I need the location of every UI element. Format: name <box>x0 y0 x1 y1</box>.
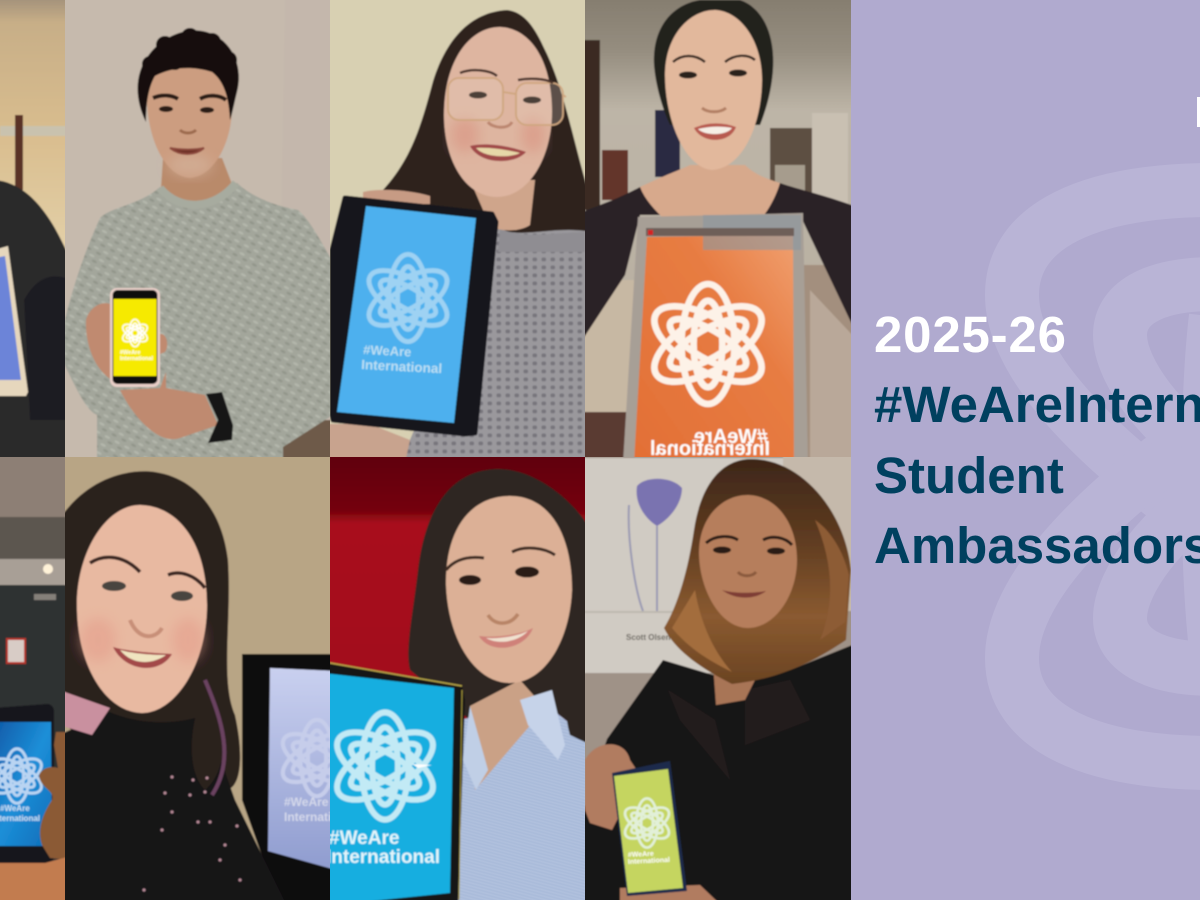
photo 3: woman with glasses and blue tablet: International <box>361 357 443 376</box>
face <box>446 496 572 683</box>
watch <box>206 392 233 443</box>
hair <box>654 0 773 125</box>
photo 8: woman in black coat with lime phone: International <box>628 857 670 866</box>
monitor <box>242 654 336 900</box>
heading: title text: Student <box>874 447 1064 504</box>
photo 5: person with blue phone (bottom row, cropped) <box>0 457 65 900</box>
sweater <box>59 712 287 900</box>
tablet <box>623 213 808 463</box>
poster caption: Scott Olsen <box>626 633 671 642</box>
pink collar <box>59 690 110 735</box>
neck <box>470 180 535 230</box>
wall sign <box>7 639 25 663</box>
brows and eyes <box>673 56 755 62</box>
hair <box>138 28 239 122</box>
logo fragment at right edge <box>1197 97 1200 127</box>
photo 5: person with blue phone (bottom row, cropped): #WeAre <box>0 804 30 813</box>
hand <box>585 744 640 830</box>
smile <box>113 647 172 668</box>
eyes and brows <box>460 70 553 83</box>
photo 3: woman with glasses and blue tablet: #WeAre <box>363 342 412 360</box>
photo 7: woman in striped shirt with cyan tablet <box>326 457 585 900</box>
sweater <box>400 228 591 463</box>
flower <box>637 479 682 526</box>
photo 4: woman in dark top with orange tablet: #WeAre <box>694 426 768 448</box>
hair <box>408 469 591 740</box>
photo 6: woman in black sweater with monitor: International <box>284 810 356 824</box>
sweater collar <box>160 183 236 205</box>
poster <box>579 458 783 673</box>
tablet <box>332 198 496 434</box>
phone <box>612 761 687 896</box>
watermark: large atom logo <box>1012 190 1200 763</box>
lower room <box>579 280 642 430</box>
brows and eyes <box>153 95 226 100</box>
brows and eyes <box>446 548 555 570</box>
shirt <box>458 700 591 900</box>
smile <box>479 628 533 648</box>
brows and eyes <box>90 557 205 588</box>
panel: right lilac background <box>851 0 1200 900</box>
photo 3: woman with glasses and blue tablet <box>330 0 585 457</box>
photo 4: woman in dark top with orange tablet: International <box>650 438 770 460</box>
heading: title text: 2025-26 <box>874 306 1067 363</box>
face <box>147 62 232 178</box>
sweater collar <box>498 228 585 252</box>
smile <box>170 148 204 154</box>
neck <box>712 650 770 705</box>
dark top <box>579 183 857 345</box>
tablet <box>0 246 28 396</box>
photo 4: woman in dark top with orange tablet <box>585 0 851 460</box>
chest <box>640 165 780 220</box>
face <box>77 505 207 713</box>
heading: title text <box>874 306 1200 574</box>
photo 2: man in grey sweater with yellow phone: #WeAre <box>120 350 140 356</box>
neck <box>161 158 232 201</box>
hands <box>86 303 112 380</box>
smile <box>470 144 526 161</box>
bookshelf and art <box>579 40 600 210</box>
brows and eyes <box>706 537 792 545</box>
phone <box>0 704 54 863</box>
photo 7: woman in striped shirt with cyan tablet: #WeAre <box>329 828 399 849</box>
photo 8: woman in black coat with lime phone <box>585 457 851 900</box>
face <box>665 10 762 170</box>
fingers <box>363 190 430 204</box>
hair <box>59 471 240 790</box>
sweater dots <box>142 776 242 892</box>
hair <box>383 10 591 240</box>
glasses <box>448 78 566 125</box>
smile <box>694 123 736 140</box>
phone <box>110 288 160 387</box>
photo 2: man in grey sweater with yellow phone: International <box>120 356 153 362</box>
photo 2: man in grey sweater with yellow phone <box>65 0 330 457</box>
face <box>699 495 797 628</box>
photo 1: person in dark top with tablet (top row, cropped) <box>0 0 65 457</box>
sweater <box>62 183 336 463</box>
photo 8: woman in black coat with lime phone: #WeAre <box>628 851 654 859</box>
smile <box>722 590 766 598</box>
hair <box>664 459 851 684</box>
hand <box>39 732 71 860</box>
face <box>444 27 552 197</box>
doorway <box>770 128 812 200</box>
photo 6: woman in black sweater with monitor <box>65 457 356 900</box>
coat <box>579 643 857 900</box>
photo 7: woman in striped shirt with cyan tablet: International <box>326 847 440 868</box>
tablet <box>324 662 465 900</box>
photo 6: woman in black sweater with monitor: #WeAre <box>284 795 329 809</box>
bottom hand <box>324 424 410 463</box>
